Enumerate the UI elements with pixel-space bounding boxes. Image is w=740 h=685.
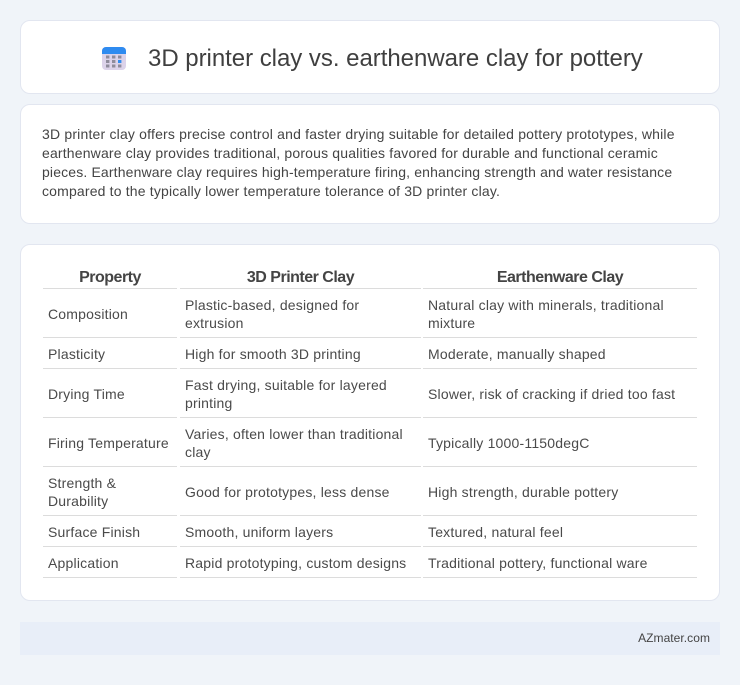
row: strength and durability (48, 475, 618, 509)
row: plasticity: High for smooth 3D printing (185, 346, 361, 362)
comparison table (43, 269, 697, 578)
table header: Property (79, 269, 141, 286)
row: surface finish: Smooth, uniform layers (185, 524, 333, 540)
row: plasticity: Plasticity (48, 346, 105, 362)
icon: calendar (102, 47, 126, 70)
row: application: Application (48, 555, 119, 571)
row: drying time: Drying Time (48, 386, 125, 402)
table header: 3D Printer Clay (247, 269, 354, 286)
row: composition (48, 297, 664, 331)
summary text: pieces. Earthenware clay requires high-temperature firing, enhancing strength and water resistance (42, 164, 672, 180)
row: composition: mixture (428, 315, 475, 331)
row: firing temperature: Varies, often lower than traditional (185, 426, 403, 442)
summary text: compared to the typically lower temperature tolerance of 3D printer clay. (42, 183, 500, 199)
row: firing temperature: Firing Temperature (48, 435, 169, 451)
row: application: Traditional pottery, functional ware (428, 555, 648, 571)
footer bar (20, 622, 720, 655)
row: drying time: Fast drying, suitable for layered (185, 377, 387, 393)
row: application (48, 555, 648, 571)
row: composition: Natural clay with minerals, traditional (428, 297, 664, 313)
table header: Earthenware Clay (497, 269, 623, 286)
row: firing temperature: Typically 1000-1150degC (428, 435, 590, 451)
summary text (42, 126, 675, 199)
row: composition: Plastic-based, designed for (185, 297, 359, 313)
row: firing temperature (48, 426, 590, 460)
row: plasticity (48, 346, 606, 362)
row: surface finish (48, 524, 563, 540)
title: 3D printer clay vs. earthenware clay for pottery (148, 45, 643, 72)
summary text: earthenware clay provides traditional, porous qualities favored for durable and functional ceramic (42, 145, 658, 161)
row: strength and durability: Strength & (48, 475, 116, 491)
header panel (20, 20, 720, 94)
table panel (20, 244, 720, 601)
row: surface finish: Surface Finish (48, 524, 140, 540)
row: surface finish: Textured, natural feel (428, 524, 563, 540)
row: drying time (48, 377, 675, 411)
row: firing temperature: clay (185, 444, 211, 460)
footer source text: AZmater.com (638, 631, 710, 645)
row: strength and durability: Good for prototypes, less dense (185, 484, 390, 500)
summary text: 3D printer clay offers precise control and faster drying suitable for detailed pottery prototypes, while (42, 126, 675, 142)
row: application: Rapid prototyping, custom designs (185, 555, 406, 571)
row: composition: Composition (48, 306, 128, 322)
row: strength and durability: High strength, durable pottery (428, 484, 618, 500)
row: plasticity: Moderate, manually shaped (428, 346, 606, 362)
row: drying time: Slower, risk of cracking if dried too fast (428, 386, 675, 402)
row: drying time: printing (185, 395, 233, 411)
table header (79, 269, 624, 286)
row: composition: extrusion (185, 315, 244, 331)
summary panel (20, 104, 720, 224)
row: strength and durability: Durability (48, 493, 108, 509)
